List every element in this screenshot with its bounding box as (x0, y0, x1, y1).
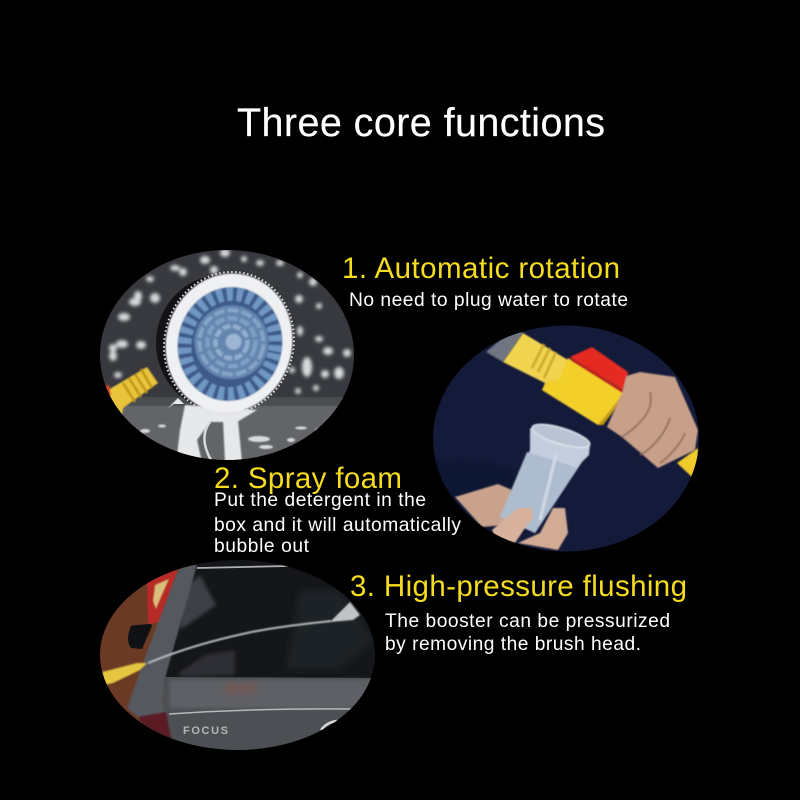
foam strand small (204, 422, 212, 462)
window top trim (197, 566, 288, 568)
red tail light (138, 712, 172, 745)
shirt shadow (436, 460, 544, 532)
description: spray foam: bubble out (214, 536, 310, 557)
finger left (492, 508, 533, 543)
car rear window (165, 560, 380, 678)
translucent measuring cup (500, 420, 592, 533)
foam droplets (109, 249, 351, 394)
car pillar (127, 565, 197, 745)
photo background: wet dark window (95, 245, 360, 410)
ring teeth (163, 271, 295, 414)
photo: detergent cup and foam gun (430, 322, 702, 560)
blue microfiber pad (176, 286, 284, 402)
heading: automatic rotation: 1. Automatic rotation (342, 252, 620, 285)
yellow handle (104, 367, 158, 415)
description: high-pressure flushing: The booster can be pressurized (385, 611, 670, 632)
photo: high-pressure flushing a car window (95, 555, 380, 755)
lower car body (163, 677, 380, 755)
body shading (170, 680, 375, 708)
clear hose (486, 330, 523, 362)
white foam ring (164, 272, 294, 412)
red trigger button (570, 347, 628, 395)
lower hand palm (455, 484, 512, 527)
window reflection (180, 575, 216, 630)
door handle (321, 721, 337, 730)
pad fibre rings (176, 286, 284, 402)
reflections on car surface (140, 424, 325, 449)
photo background: wet car surface (114, 403, 340, 460)
foam drips (177, 405, 257, 462)
title: Three core functions (237, 101, 605, 145)
yellow gun body (503, 333, 627, 425)
yellow nozzle (102, 663, 147, 685)
description: high-pressure flushing: by removing the brush head. (385, 634, 641, 655)
FOCUS badge: FOCUS (183, 725, 228, 737)
water splash (330, 602, 360, 622)
description: automatic rotation: No need to plug water to rotate (349, 290, 628, 311)
description: spray foam: box and it will automatically (214, 515, 461, 536)
chrome line (169, 709, 352, 714)
hand on gun (607, 372, 698, 468)
knuckle creases (622, 392, 685, 463)
red door banner (147, 569, 178, 624)
door reflection (226, 682, 256, 694)
description: spray foam: Put the detergent in the (214, 490, 426, 511)
horizon strip (95, 397, 360, 406)
heading: spray foam: 2. Spray foam (214, 462, 402, 495)
brown wooden door (100, 564, 195, 746)
black brush housing (156, 275, 221, 407)
heading: high-pressure flushing: 3. High-pressure flushing (350, 570, 687, 603)
window reflection right (285, 590, 375, 670)
pad base (176, 286, 284, 402)
yellow handle end (677, 448, 699, 477)
water jet (148, 621, 331, 663)
window reflection lower (178, 650, 235, 677)
gold banner pattern (153, 579, 169, 609)
navy shirt background (430, 322, 702, 554)
side mirror (128, 624, 152, 649)
finger right (518, 508, 568, 550)
foam fleck left (168, 398, 184, 408)
foam strand right (223, 420, 242, 462)
photo: rotating brush head (95, 245, 360, 465)
